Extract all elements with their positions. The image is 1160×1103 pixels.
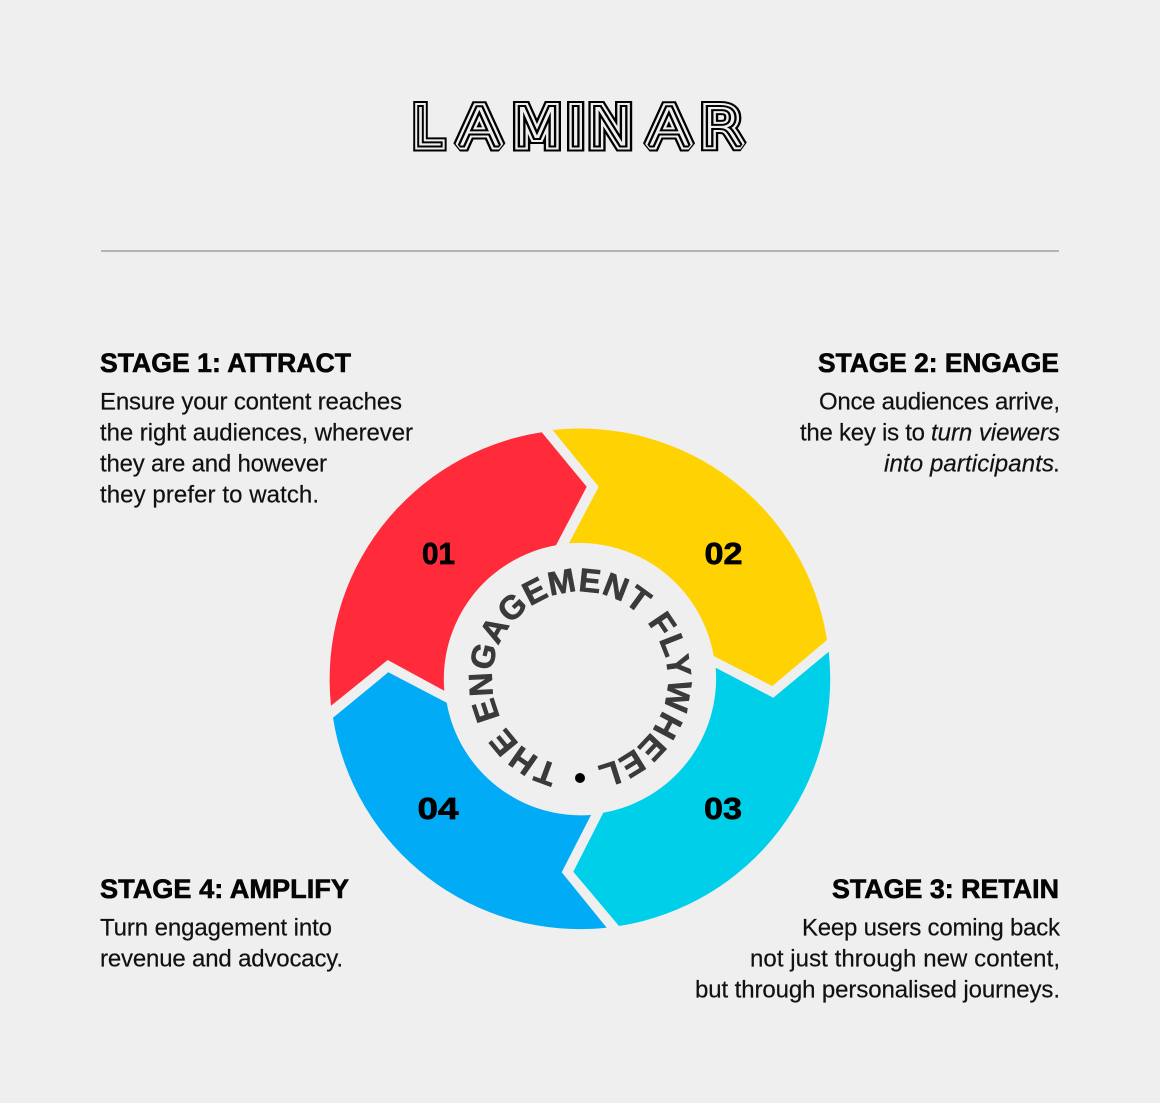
- segment 02 yellow: 02: [704, 536, 742, 571]
- text: stage 4 description: [100, 915, 343, 973]
- logo: LAMINAR: AMINAR: [458, 96, 744, 159]
- text: stage 2 description: Once audiences arrive,: [819, 388, 1060, 416]
- logo: LAMINAR: AMINAR: [458, 96, 744, 159]
- heading: stage 1: STAGE 1: ATTRACT: [100, 348, 351, 378]
- text: stage 1 description: [100, 388, 413, 508]
- text: stage 2 description: the key is to: [800, 420, 925, 446]
- text: stage 2 description: into participants: [884, 450, 1054, 478]
- text: stage 3 description: not just through new content,: [750, 946, 1060, 973]
- text: stage 3 description: but through personalised journeys.: [695, 977, 1060, 1004]
- heading: stage 3: STAGE 3: RETAIN: [832, 874, 1059, 904]
- text: stage 4 description: Turn engagement into: [100, 915, 332, 942]
- text: stage 1 description: Ensure your content reaches: [100, 388, 402, 416]
- panel: stage 2 engage: [800, 348, 1060, 478]
- center dot: [575, 773, 585, 783]
- text: stage 2 description: [800, 388, 1060, 478]
- logo: LAMINAR: L: [413, 98, 442, 159]
- logo: LAMINAR: AMINAR: [458, 96, 744, 159]
- segment 02 yellow: [553, 429, 827, 686]
- text: stage 3 description: [695, 915, 1061, 1004]
- text: stage 2 description: turn viewers: [931, 420, 1060, 446]
- text: stage 4 description: revenue and advocacy.: [100, 946, 343, 973]
- text: stage 1 description: the right audiences, wherever: [100, 420, 413, 446]
- heading: stage 2: STAGE 2: ENGAGE: [818, 348, 1059, 378]
- panel: stage 4 amplify: [100, 874, 349, 973]
- circular title: the engagement flywheel: THE ENGAGEMENT FLYWHEEL: [468, 568, 692, 788]
- logo: LAMINAR: L: [413, 98, 442, 159]
- heading: stage 4: STAGE 4: AMPLIFY: [100, 874, 349, 904]
- logo: LAMINAR: L: [413, 98, 442, 159]
- panel: stage 1 attract: [100, 348, 413, 508]
- segment 04 blue: [333, 672, 607, 929]
- segment 03 cyan: 03: [704, 791, 742, 826]
- text: stage 1 description: they prefer to watch.: [100, 482, 319, 508]
- logo: LAMINAR: AMINAR: [458, 96, 744, 159]
- segment 01 red: [330, 432, 587, 706]
- chart: engagement flywheel: [330, 428, 830, 930]
- logo: LAMINAR: L: [413, 98, 442, 159]
- panel: stage 3 retain: [695, 874, 1061, 1004]
- segment 04 blue: 04: [418, 791, 459, 826]
- segment 01 red: 01: [422, 536, 455, 571]
- text: stage 3 description: Keep users coming back: [802, 915, 1061, 942]
- segment 03 cyan: [573, 652, 830, 926]
- text: stage 1 description: they are and however: [100, 450, 327, 478]
- text: stage 2 description: .: [1053, 450, 1060, 478]
